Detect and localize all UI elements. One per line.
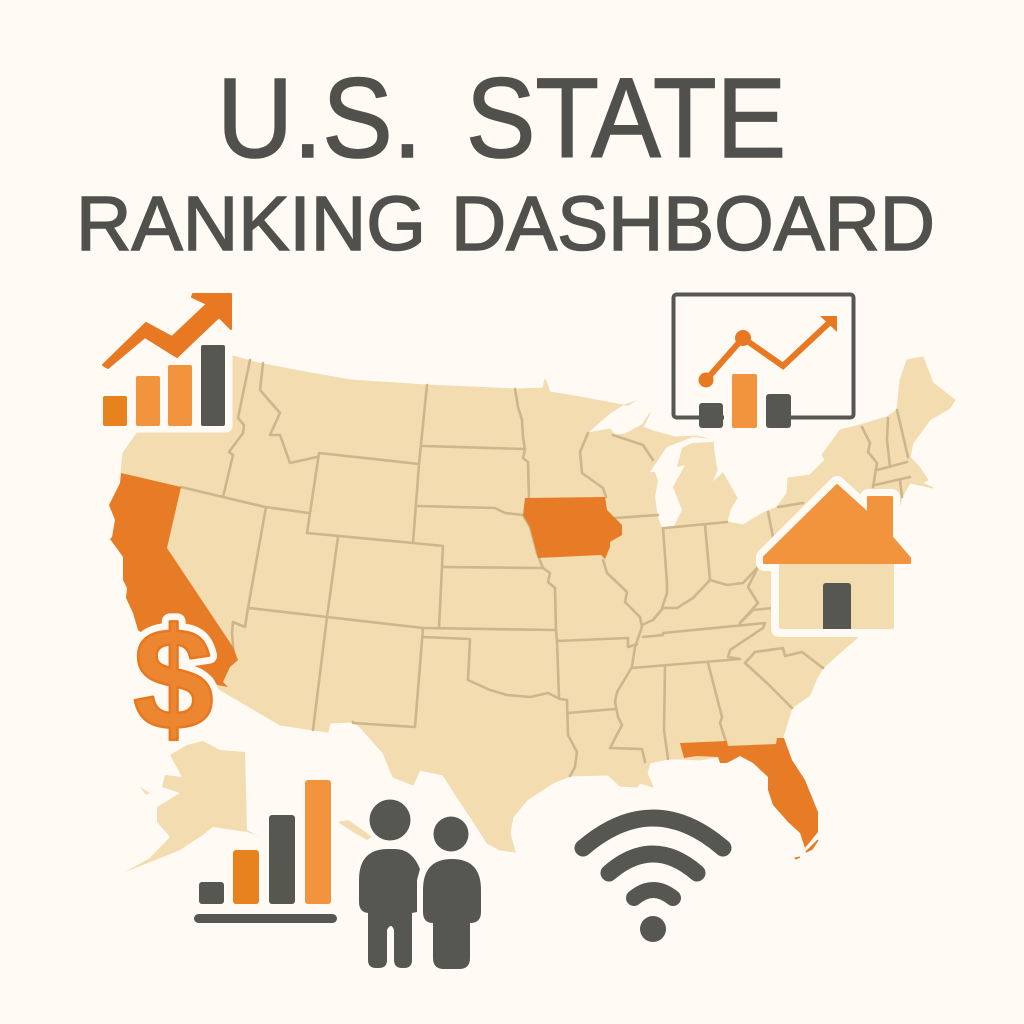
board bars [699, 374, 791, 428]
gap beneath frame between bars [724, 414, 766, 420]
title: U.S. [217, 55, 422, 181]
title: STATE [466, 55, 786, 181]
map: Hawaii [338, 820, 372, 840]
icon: house [764, 484, 910, 629]
house door [823, 583, 851, 629]
icon: dollar sign: $ [133, 598, 214, 760]
highlighted state: California [109, 473, 238, 687]
growth bars [103, 345, 225, 426]
map: Lake Michigan [650, 437, 713, 528]
house roof and chimney [764, 485, 910, 563]
highlighted state: Iowa [523, 497, 622, 559]
trend line with markers [698, 316, 837, 388]
house halo [764, 484, 910, 629]
icon: dollar sign: $ [133, 598, 214, 760]
board frame [674, 294, 854, 418]
map: Alaska [125, 741, 260, 872]
title: DASHBOARD [451, 181, 935, 267]
highlighted state: Florida [680, 738, 818, 859]
map: state borders [181, 360, 910, 776]
icon: bar chart with baseline [194, 780, 337, 923]
rising arrow [103, 294, 231, 368]
icon: growth chart with arrow [103, 294, 231, 426]
map: contiguous United States [121, 356, 955, 852]
person right [423, 816, 481, 969]
title: RANKING [76, 181, 426, 267]
title [76, 55, 935, 267]
house body [779, 560, 894, 629]
person left [359, 800, 420, 968]
icon: wifi signal [583, 818, 723, 942]
map: Isle Royale [623, 400, 637, 406]
icon: two people [359, 800, 481, 969]
icon: chart board [674, 294, 854, 428]
